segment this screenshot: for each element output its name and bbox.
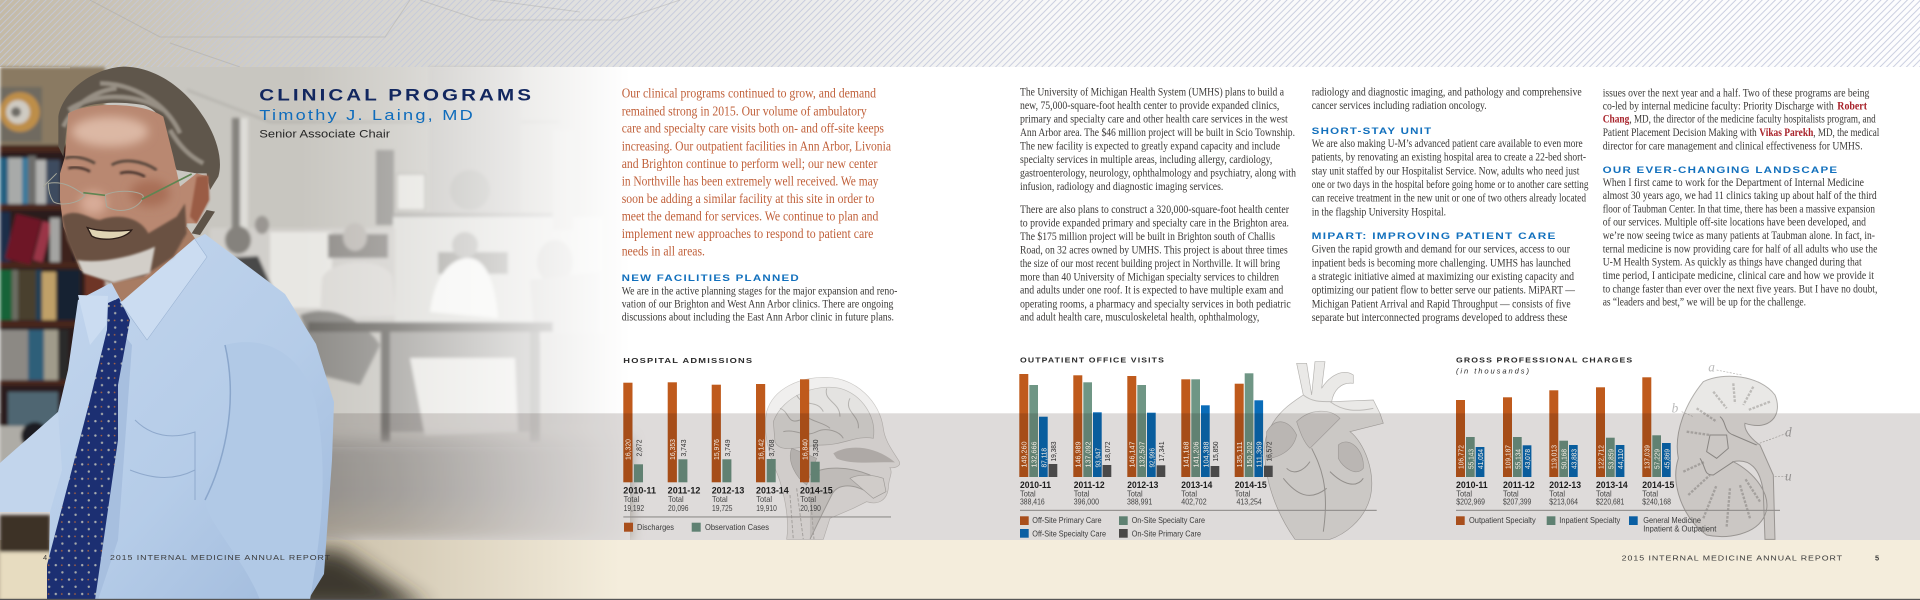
chart labels: outpatient office visits: 141,168 xyxy=(1182,442,1191,468)
text column: short-stay unit and MiPART: stay unit staffed by our Hospitalist Service. Now, adults who need just xyxy=(1312,165,1580,177)
text column: short-stay unit and MiPART: radiology and diagnostic imaging, and pathology and comprehensive xyxy=(1312,87,1582,99)
section: new facilities planned: We are in the active planning stages for the major expansion and reno- xyxy=(622,285,898,297)
left page footer: 2015 INTERNAL MEDICINE ANNUAL REPORT xyxy=(110,553,331,562)
intro paragraph xyxy=(622,86,891,259)
chart labels: gross professional charges: General Medicine xyxy=(1643,516,1701,525)
chart labels: gross professional charges: Total xyxy=(1503,488,1519,498)
chart labels: outpatient office visits: 132,507 xyxy=(1138,442,1147,468)
chart labels: hospital admissions: Total xyxy=(668,494,684,504)
text column: ever-changing landscape: Chang xyxy=(1603,114,1630,126)
chart labels: gross professional charges: 50,168 xyxy=(1560,449,1569,469)
chart labels: outpatient office visits: 2012-13 xyxy=(1127,480,1158,490)
chart labels: hospital admissions: 19,725 xyxy=(712,503,733,513)
chart labels: outpatient office visits: 149,260 xyxy=(1020,442,1029,468)
text column: short-stay unit and MiPART: a strategic initiative aimed at maximizing our existing capacity and xyxy=(1312,271,1574,283)
text column: short-stay unit and MiPART: patients, by renovating an existing hospital area to create a 22-bed short- xyxy=(1312,152,1586,164)
chart labels: outpatient office visits: 17,341 xyxy=(1157,442,1166,462)
chart labels: outpatient office visits: 146,147 xyxy=(1128,442,1137,468)
text column: ever-changing landscape: ternal medicine is now providing care for half of all adults who use the xyxy=(1603,243,1877,255)
illustration: kidney anatomy: a xyxy=(1708,360,1715,375)
text column: UMHS plans: infusion, radiology and diagnostic imaging services. xyxy=(1020,181,1223,193)
text column: UMHS plans: and adults under one roof. It is expected to have multiple exam and xyxy=(1020,285,1284,297)
chart labels: gross professional charges: 119,013 xyxy=(1550,445,1559,469)
bar chart: outpatient office visits bars xyxy=(1019,373,1273,477)
chart labels: outpatient office visits: 396,000 xyxy=(1074,496,1099,506)
chart labels: hospital admissions: 3,749 xyxy=(723,440,732,456)
chart labels: outpatient office visits: On-Site Specialty Care xyxy=(1132,516,1205,525)
chart labels: outpatient office visits: 132,666 xyxy=(1030,442,1039,468)
chart labels: hospital admissions: 19,910 xyxy=(756,503,777,513)
illustration: head and brain anatomy xyxy=(765,377,900,539)
text column: UMHS plans: gastroenterology, neurology, ophthalmology and psychiatry, along with xyxy=(1020,167,1296,179)
chart labels: outpatient office visits: 150,202 xyxy=(1245,442,1254,468)
chart labels: outpatient office visits: 137,092 xyxy=(1084,442,1093,468)
chart labels: outpatient office visits: 16,572 xyxy=(1264,442,1273,462)
chart labels: outpatient office visits: On-Site Primary Care xyxy=(1132,529,1201,538)
chart labels: hospital admissions: 2014-15 xyxy=(800,486,833,496)
chart labels: gross professional charges: 57,229 xyxy=(1653,449,1662,469)
chart labels: hospital admissions: 3,350 xyxy=(811,440,820,456)
chart labels: gross professional charges: Total xyxy=(1596,488,1612,498)
cream footer strip xyxy=(0,540,1920,600)
chart labels: gross professional charges: Total xyxy=(1456,488,1472,498)
chart labels: outpatient office visits: 2010-11 xyxy=(1020,480,1051,490)
text column: UMHS plans: The University of Michigan Health System (UMHS) plans to build a xyxy=(1020,87,1284,99)
chart labels: outpatient office visits: 19,383 xyxy=(1049,442,1058,462)
text column: UMHS plans xyxy=(1020,87,1296,324)
text column: UMHS plans: to provide expanded primary and specialty care in the Brighton area. xyxy=(1020,218,1289,230)
text column: UMHS plans: and adult health care, musculoskeletal health, ophthalmology, xyxy=(1020,312,1259,324)
shadow beside portrait xyxy=(290,550,430,600)
gray band across lower spread xyxy=(0,413,1920,540)
chart labels: gross professional charges: 55,134 xyxy=(1513,449,1522,469)
chart labels: outpatient office visits: 104,388 xyxy=(1201,442,1210,468)
text column: ever-changing landscape: as “leaders and best,” we will be up for the challenge. xyxy=(1603,297,1806,309)
section: new facilities planned: vation of our Brighton and West Ann Arbor clinics. There are ongoing xyxy=(622,298,894,310)
chart labels: gross professional charges: Inpatient & Outpatient xyxy=(1643,524,1717,534)
text column: ever-changing landscape: time period, I anticipate medicine, clinical care and how we provide it xyxy=(1603,270,1875,282)
text column: UMHS plans: new, 75,000-square-foot health center to provide expanded clinics, xyxy=(1020,100,1279,112)
chart labels: hospital admissions: Observation Cases xyxy=(705,523,769,532)
chart labels: gross professional charges: 2014-15 xyxy=(1642,480,1674,490)
text column: ever-changing landscape: of our services. Multiple off-site locations have been developed, and xyxy=(1603,217,1866,229)
chart labels: gross professional charges: 55,143 xyxy=(1466,449,1475,469)
text column: short-stay unit and MiPART: in the flagship University Hospital. xyxy=(1312,206,1446,218)
text column: short-stay unit and MiPART: MIPART: IMPROVING PATIENT CARE xyxy=(1312,231,1557,241)
chart labels: gross professional charges: 41,054 xyxy=(1476,449,1485,469)
chart labels: outpatient office visits: 2011-12 xyxy=(1074,480,1105,490)
floor tone in footer xyxy=(0,540,620,600)
chart labels: gross professional charges: $202,969 xyxy=(1456,496,1485,506)
intro paragraph: meet the demand for services. We continue to plan and xyxy=(622,208,878,223)
chart labels: hospital admissions: 2010-11 xyxy=(623,486,656,496)
text column: UMHS plans: the size of our most recent building project in Northville. It will bring xyxy=(1020,258,1280,270)
chart labels: outpatient office visits: 2014-15 xyxy=(1235,480,1267,490)
chart labels: gross professional charges: $207,399 xyxy=(1503,496,1532,506)
chart labels: hospital admissions: 2,872 xyxy=(634,440,643,456)
chart labels: hospital admissions: 15,976 xyxy=(712,439,721,460)
intro paragraph: soon be adding a similar facility at this site in order to xyxy=(622,191,874,206)
chart labels: gross professional charges: 122,712 xyxy=(1596,445,1605,469)
title block xyxy=(259,86,534,140)
text column: ever-changing landscape: U-M Health System. As quickly as things have changed during that xyxy=(1603,257,1862,269)
chart labels: gross professional charges: $240,168 xyxy=(1642,496,1671,506)
chart labels: hospital admissions: 2012-13 xyxy=(712,486,744,496)
chart labels: hospital admissions: 16,840 xyxy=(800,439,809,460)
text column: ever-changing landscape: Patient Placement Decision Making with xyxy=(1603,127,1757,139)
text column: UMHS plans: operating rooms, a pharmacy and specialty services in both pediatric xyxy=(1020,298,1291,310)
chart labels: outpatient office visits: Total xyxy=(1020,488,1036,498)
text column: UMHS plans: primary and specialty care and other health care services in the west xyxy=(1020,114,1288,126)
right page footer: 5 xyxy=(1875,554,1880,562)
right page footer: 2015 INTERNAL MEDICINE ANNUAL REPORT xyxy=(1622,554,1843,562)
text column: short-stay unit and MiPART: We are also making U-M’s advanced patient care available to even more xyxy=(1312,138,1583,150)
chart labels: gross professional charges: $220,681 xyxy=(1596,496,1625,506)
chart labels: outpatient office visits: 402,702 xyxy=(1181,496,1207,506)
chart labels: hospital admissions: Total xyxy=(624,494,639,504)
chart labels: gross professional charges: 106,772 xyxy=(1456,445,1465,469)
section: new facilities planned: NEW FACILITIES PLANNED xyxy=(622,273,800,283)
bar chart: gross professional charges bars xyxy=(1456,377,1671,477)
intro paragraph: increasing. Our outpatient facilities in Ann Arbor, Livonia xyxy=(622,138,891,153)
illustration: kidney anatomy xyxy=(1672,360,1792,539)
text column: short-stay unit and MiPART: Michigan Patient Arrival and Rapid Throughput — consists of five xyxy=(1312,298,1571,310)
chart labels: hospital admissions: 20,096 xyxy=(668,503,689,513)
text column: short-stay unit and MiPART: SHORT-STAY UNIT xyxy=(1312,126,1432,136)
chart labels: gross professional charges: (in thousands) xyxy=(1456,367,1530,376)
text column: UMHS plans: The new facility is expected to greatly expand capacity and include xyxy=(1020,140,1280,152)
section: new facilities planned xyxy=(622,273,898,324)
text column: UMHS plans: Ann Arbor area. The $46 million project will be built in Scio Township. xyxy=(1020,127,1295,139)
chart labels: outpatient office visits: OUTPATIENT OFFICE VISITS xyxy=(1020,356,1165,365)
chart labels: gross professional charges: 53,859 xyxy=(1606,449,1615,469)
intro paragraph: remained strong in 2015. Our volume of ambulatory xyxy=(622,103,867,118)
text column: ever-changing landscape: director for care management and clinical effectiveness for UMHS. xyxy=(1603,140,1863,152)
left page footer xyxy=(43,553,331,562)
text column: UMHS plans: more than 40 University of Michigan specialty services to children xyxy=(1020,271,1279,283)
text column: UMHS plans: specialty services in multiple areas, including allergy, cardiology, xyxy=(1020,154,1272,166)
text column: short-stay unit and MiPART: cancer services including radiation oncology. xyxy=(1312,100,1487,112)
chart labels: gross professional charges: 43,078 xyxy=(1523,449,1532,469)
chart labels: outpatient office visits: 413,254 xyxy=(1236,496,1262,506)
chart labels: hospital admissions: Total xyxy=(712,494,728,504)
page edge line xyxy=(0,599,1920,600)
chart labels: gross professional charges: 2012-13 xyxy=(1549,480,1581,490)
chart labels: gross professional charges: Total xyxy=(1642,488,1658,498)
text column: ever-changing landscape: When I first came to work for the Department of Internal Medicine xyxy=(1603,177,1864,189)
chart labels: outpatient office visits: 92,996 xyxy=(1147,448,1156,468)
title block: Senior Associate Chair xyxy=(259,128,390,140)
intro paragraph: care and specialty care visits both on- and off-site keeps xyxy=(622,121,884,136)
text column: UMHS plans: Road, on 32 acres owned by UMHS. This project is about three times xyxy=(1020,244,1288,256)
chart labels: outpatient office visits: Off-Site Specialty Care xyxy=(1032,529,1106,538)
text column: ever-changing landscape xyxy=(1603,87,1879,309)
text column: ever-changing landscape: almost 30 years ago, we had 11 clinics taking up about half of the third xyxy=(1603,190,1877,202)
chart labels: gross professional charges: 137,039 xyxy=(1643,445,1652,469)
chart labels: gross professional charges: 2013-14 xyxy=(1596,480,1628,490)
text column: ever-changing landscape: co-led by internal medicine faculty: Priority Discharge with xyxy=(1603,100,1834,112)
chart labels: outpatient office visits: Total xyxy=(1181,488,1197,498)
chart labels: gross professional charges: 2011-12 xyxy=(1503,480,1535,490)
bar chart: hospital admissions bars xyxy=(623,379,820,482)
illustration: kidney anatomy: d xyxy=(1785,425,1792,440)
chart labels: outpatient office visits: 146,989 xyxy=(1074,442,1083,468)
chart labels: gross professional charges: 2010-11 xyxy=(1456,480,1488,490)
chart labels: gross professional charges: 43,883 xyxy=(1569,449,1578,469)
chart labels: outpatient office visits: 15,850 xyxy=(1211,442,1220,462)
intro paragraph: implement new approaches to respond to patient care xyxy=(622,226,873,241)
text column: ever-changing landscape: OUR EVER-CHANGING LANDSCAPE xyxy=(1603,165,1838,175)
chart labels: hospital admissions: 16,353 xyxy=(668,439,677,460)
chart labels: hospital admissions: 20,190 xyxy=(800,503,821,513)
text column: short-stay unit and MiPART: Given the rapid growth and demand for our services, access to our xyxy=(1312,244,1570,256)
text column: ever-changing landscape: we’re now seeing twice as many patients at Taubman alone. In fact, in- xyxy=(1603,230,1875,242)
text column: UMHS plans: There are also plans to construct a 320,000-square-foot health center xyxy=(1020,204,1289,216)
chart labels: outpatient office visits: 2013-14 xyxy=(1181,480,1212,490)
chart labels: gross professional charges: Inpatient Specialty xyxy=(1559,516,1621,525)
chart labels: hospital admissions: 3,743 xyxy=(679,440,688,456)
text column: ever-changing landscape: Robert xyxy=(1837,100,1867,112)
chart labels: outpatient office visits: Total xyxy=(1127,488,1143,498)
chart labels: gross professional charges: 109,187 xyxy=(1503,445,1512,469)
text column: ever-changing landscape: Vikas Parekh xyxy=(1759,127,1814,139)
chart labels: outpatient office visits: 111,369 xyxy=(1255,442,1264,468)
chart labels: hospital admissions: HOSPITAL ADMISSIONS xyxy=(623,356,753,365)
chart labels: hospital admissions: 16,320 xyxy=(624,439,633,460)
title block: Timothy J. Laing, MD xyxy=(259,108,475,124)
section: new facilities planned: discussions about including the East Ann Arbor clinic in future plans. xyxy=(622,312,894,324)
chart labels: gross professional charges xyxy=(1456,356,1780,534)
chart labels: hospital admissions xyxy=(623,356,891,532)
chart labels: hospital admissions: Total xyxy=(800,494,816,504)
chart labels: outpatient office visits: Off-Site Primary Care xyxy=(1032,516,1102,525)
text column: short-stay unit and MiPART: optimizing our patient flow to better serve our patients. MiPART — xyxy=(1312,285,1576,297)
portrait: necktie xyxy=(47,298,130,600)
chart labels: outpatient office visits: 141,206 xyxy=(1192,442,1201,468)
chart labels: hospital admissions: Discharges xyxy=(637,523,674,532)
chart labels: outpatient office visits: 87,118 xyxy=(1039,448,1048,468)
chart labels: outpatient office visits: 18,072 xyxy=(1103,442,1112,462)
text column: short-stay unit and MiPART xyxy=(1312,87,1589,324)
text column: ever-changing landscape: to change faster than ever over the next five years. But I have no doubt, xyxy=(1603,283,1878,295)
text column: short-stay unit and MiPART: can receive treatment in the new unit or one of two others already located xyxy=(1312,193,1586,205)
chart labels: gross professional charges: $213,064 xyxy=(1549,496,1578,506)
intro paragraph: in Northville has been extremely well received. We may xyxy=(622,173,878,188)
chart labels: outpatient office visits: 388,991 xyxy=(1127,496,1153,506)
illustration: heart anatomy xyxy=(1265,362,1383,539)
chart labels: gross professional charges: 44,110 xyxy=(1616,449,1625,469)
illustration: kidney anatomy: u xyxy=(1785,468,1792,483)
text column: ever-changing landscape: issues over the next year and a half. Two of these programs are being xyxy=(1603,87,1870,99)
chart labels: hospital admissions: 16,142 xyxy=(756,439,765,460)
chart labels: gross professional charges: Outpatient Specialty xyxy=(1469,516,1537,525)
chart labels: gross professional charges: 45,869 xyxy=(1662,449,1671,469)
chart labels: outpatient office visits: 93,947 xyxy=(1093,448,1102,468)
chart labels: hospital admissions: 2011-12 xyxy=(668,486,700,496)
illustration: kidney anatomy: b xyxy=(1672,400,1679,415)
text column: ever-changing landscape: , MD, the medical xyxy=(1813,127,1879,139)
portrait: head with hair, beard and glasses xyxy=(43,67,220,302)
title block: CLINICAL PROGRAMS xyxy=(259,86,534,105)
text column: UMHS plans: The $175 million project will be built in Brighton south of Challis xyxy=(1020,231,1275,243)
portrait: bookshelves behind subject xyxy=(0,67,105,600)
chart labels: hospital admissions: 2013-14 xyxy=(756,486,789,496)
text column: short-stay unit and MiPART: one or two days in the hospital before going home or to another care setting xyxy=(1312,179,1589,191)
chart labels: hospital admissions: 19,192 xyxy=(624,503,644,513)
chart labels: outpatient office visits xyxy=(1020,356,1377,538)
chart labels: outpatient office visits: Total xyxy=(1074,488,1090,498)
intro paragraph: Our clinical programs continued to grow, and demand xyxy=(622,86,876,101)
chart labels: hospital admissions: Total xyxy=(756,494,772,504)
chart labels: hospital admissions: 3,768 xyxy=(767,440,776,456)
chart labels: gross professional charges: GROSS PROFESSIONAL CHARGES xyxy=(1456,356,1633,365)
chart labels: gross professional charges: Total xyxy=(1549,488,1565,498)
intro paragraph: needs in all areas. xyxy=(622,244,705,259)
chart labels: outpatient office visits: Total xyxy=(1235,488,1251,498)
intro paragraph: and Brighton continue to perform well; our new center xyxy=(622,156,878,171)
left page footer: 4 xyxy=(43,553,48,562)
text column: short-stay unit and MiPART: inpatient beds is becoming more challenging. UMHS has launched xyxy=(1312,257,1571,269)
portrait: collar xyxy=(78,235,207,345)
portrait: shirt xyxy=(0,234,334,600)
chart labels: outpatient office visits: 388,416 xyxy=(1020,496,1045,506)
background photo: vintage hospital ward xyxy=(70,67,630,547)
text column: short-stay unit and MiPART: separate but interconnected programs developed to address these xyxy=(1312,312,1567,324)
chart labels: outpatient office visits: 135,111 xyxy=(1235,442,1244,468)
top hatched band xyxy=(0,0,1920,67)
